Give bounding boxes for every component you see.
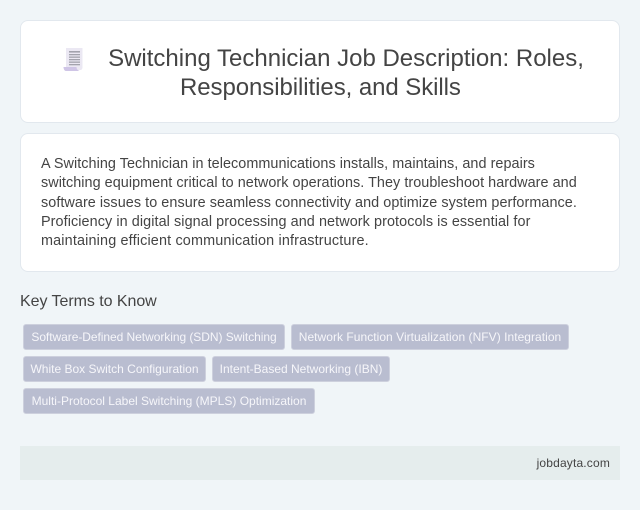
- tag: IBN: [212, 356, 390, 382]
- text block: description: software issues to ensure seamless connectivity and optimize system performance.: [41, 195, 577, 211]
- tag list: [23, 324, 569, 414]
- title: Responsibilities, and Skills: [180, 74, 461, 101]
- tag: white box: White Box Switch Configuration: [30, 362, 199, 376]
- tag: NFV: [291, 324, 569, 350]
- tag: SDN: [23, 324, 285, 350]
- panel: description: [20, 133, 620, 272]
- title: Switching Technician Job Description: Roles,: [108, 45, 584, 72]
- tag: MPLS: [23, 388, 315, 414]
- text block: description: switching equipment critical to network operations. They troubleshoot hardware and: [41, 175, 577, 191]
- tag: NFV: Network Function Virtualization (NFV) Integration: [299, 330, 561, 344]
- heading: key terms: Key Terms to Know: [20, 293, 157, 310]
- tag: MPLS: Multi-Protocol Label Switching (MPLS) Optimization: [32, 394, 306, 408]
- tag: white box: [23, 356, 206, 382]
- text block: description: [41, 156, 577, 249]
- text block: description: Proficiency in digital signal processing and network protocols is essential for: [41, 214, 530, 230]
- text block: description: maintaining efficient communication infrastructure.: [41, 233, 369, 249]
- title: [108, 45, 584, 101]
- footer text: jobdayta.com: [537, 456, 610, 470]
- icon: document scroll: [64, 48, 82, 71]
- text block: description: A Switching Technician in telecommunications installs, maintains, and repairs: [41, 156, 535, 172]
- footer bar: [20, 446, 620, 480]
- tag: SDN: Software-Defined Networking (SDN) Switching: [31, 330, 277, 344]
- panel: title card: [20, 20, 620, 123]
- tag: IBN: Intent-Based Networking (IBN): [220, 362, 382, 376]
